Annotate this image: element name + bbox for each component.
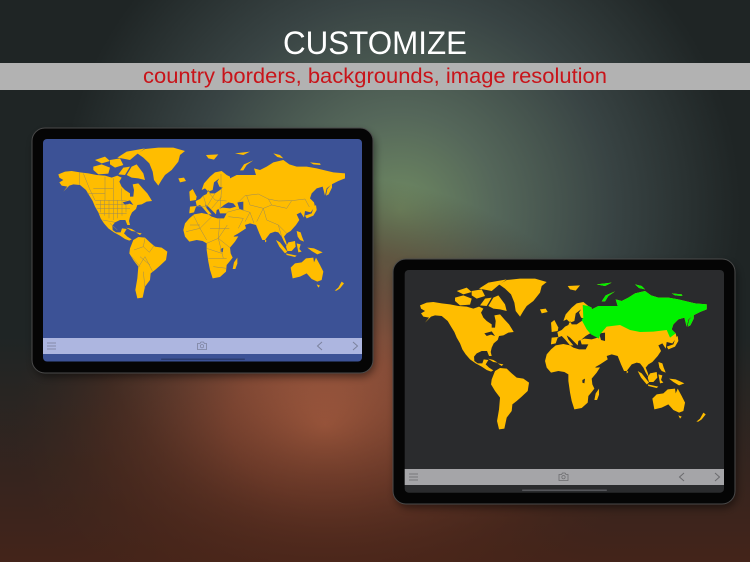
tablet: dark background map with Russia highlighted xyxy=(393,259,737,508)
icon: menu xyxy=(47,343,56,349)
world map: yellow, no borders xyxy=(420,279,707,429)
home indicator xyxy=(161,358,245,360)
icon: next xyxy=(715,473,720,481)
home indicator xyxy=(522,490,607,491)
icon: camera xyxy=(559,473,568,480)
icon: previous xyxy=(318,342,322,350)
title: CUSTOMIZE xyxy=(283,25,467,61)
screen: blue xyxy=(43,139,362,362)
subtitle band xyxy=(0,63,750,90)
icon: camera xyxy=(198,342,206,350)
subtitle band: country borders, backgrounds, image resolution xyxy=(143,65,607,88)
icon: previous xyxy=(680,473,684,481)
icon: menu xyxy=(409,474,418,480)
tablet: blue background map with country borders xyxy=(32,128,375,377)
screen: dark xyxy=(405,270,724,493)
icon: next xyxy=(353,342,358,350)
toolbar: gray xyxy=(405,469,724,485)
toolbar: light blue xyxy=(43,338,362,354)
Russia highlighted green xyxy=(582,283,707,339)
world map: yellow with borders xyxy=(58,148,345,298)
